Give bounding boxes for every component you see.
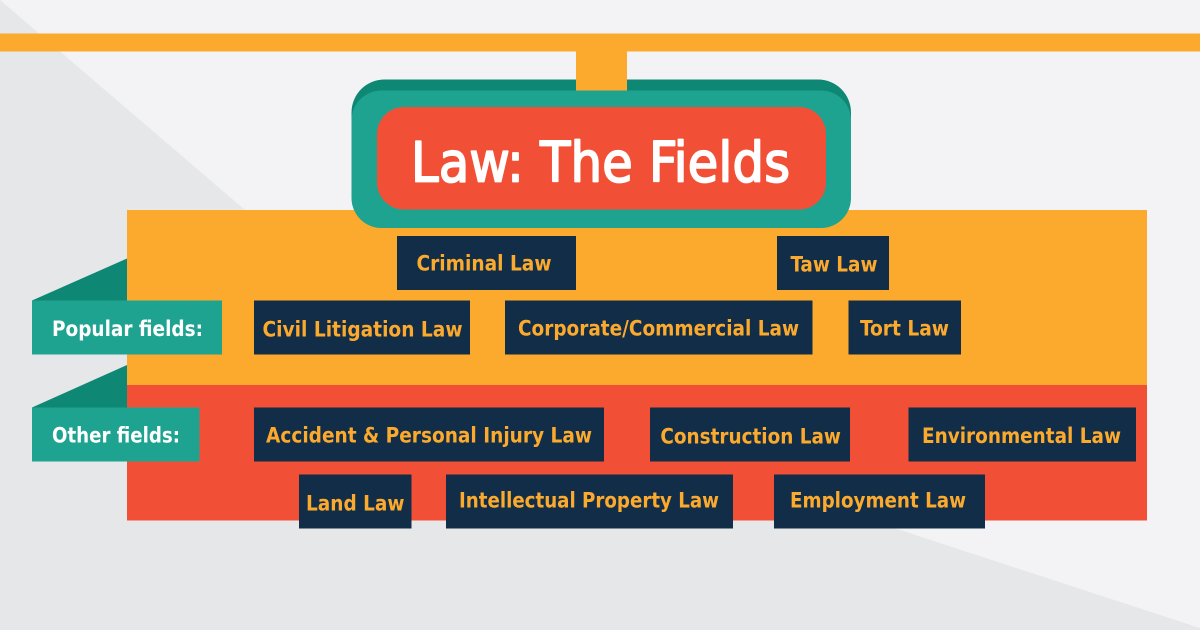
field: Employment Law [774,474,985,528]
field: Criminal Law [397,236,576,290]
ribbon: other fields: Other fields: [52,424,180,449]
field: Corporate/Commercial Law [505,300,812,354]
field: Construction Law [650,408,850,462]
field: Corporate/Commercial Law: Corporate/Commercial Law [518,316,799,341]
field: Environmental Law [908,408,1136,462]
panel: other fields background [127,385,1147,520]
field: Land Law: Land Law [306,491,405,516]
ribbon: popular fields [32,258,222,354]
title plaque [352,50,851,228]
field: Taw Law [777,236,889,290]
title: Law: The Fields [411,130,790,194]
field: Intellectual Property Law: Intellectual Property Law [459,488,719,513]
plaque hanging stem [576,50,627,90]
field: Land Law [299,474,412,528]
field: Environmental Law: Environmental Law [922,424,1121,449]
field: Criminal Law: Criminal Law [416,252,552,277]
panel: popular fields background [127,210,1147,385]
field: Tort Law [848,300,961,354]
field: Accident & Personal Injury Law [254,408,604,462]
ribbon: other fields [32,365,200,462]
field: Construction Law: Construction Law [660,424,841,449]
ribbon: popular fields: Popular fields: [52,317,203,342]
top hanging bar [0,34,1200,52]
field: Civil Litigation Law [254,300,470,354]
field: Civil Litigation Law: Civil Litigation Law [262,318,463,343]
field: Accident & Personal Injury Law: Accident & Personal Injury Law [266,423,592,448]
field: Taw Law: Taw Law [790,253,878,278]
field: Intellectual Property Law [446,474,733,528]
field: Tort Law: Tort Law [860,316,949,341]
field: Employment Law: Employment Law [790,488,966,513]
